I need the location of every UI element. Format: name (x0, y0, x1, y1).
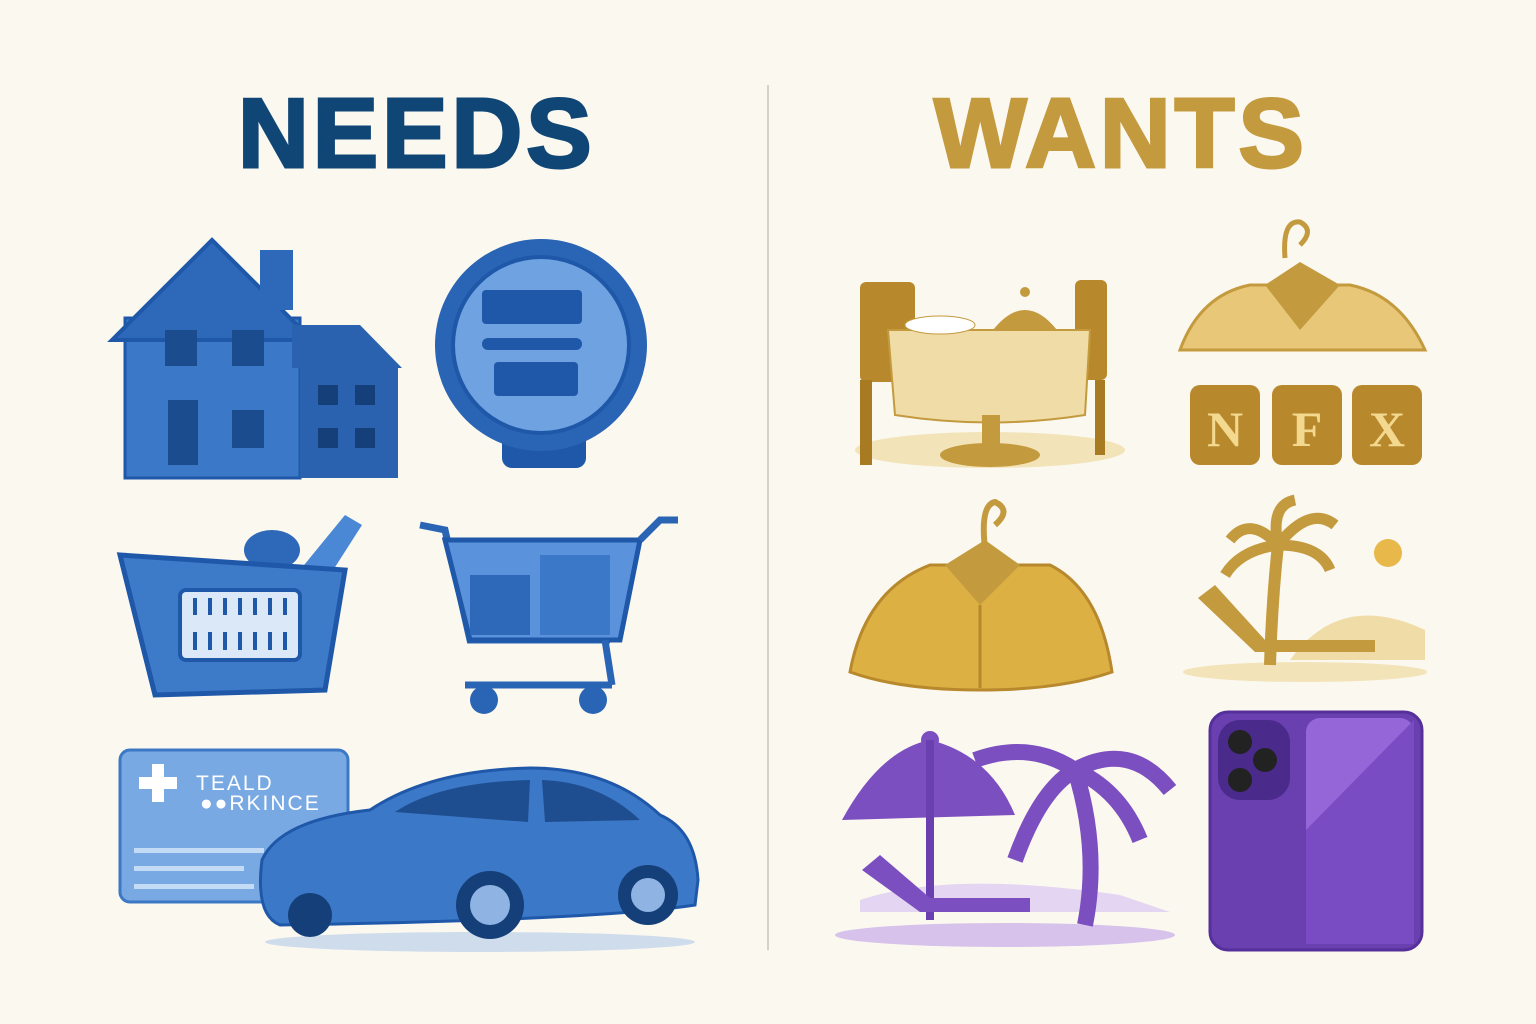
icon: shopping cart (420, 520, 678, 714)
title: wants: WANTS (934, 78, 1308, 188)
icon: smartphone (1210, 712, 1422, 950)
title: needs: NEEDS (238, 78, 596, 188)
icon: restaurant dining (855, 280, 1125, 468)
icon: NFX streaming tiles: X (1369, 401, 1405, 457)
icon: insurance card: ●●RKINCE (200, 792, 321, 815)
icon: shirt on hanger (850, 502, 1112, 690)
icon: NFX streaming tiles (1190, 385, 1422, 465)
icon: car (260, 768, 698, 952)
icon: house (112, 240, 402, 478)
icon: utility meter (435, 239, 647, 468)
icon: beach lounger with palm (1183, 500, 1427, 682)
icon: beach umbrella (835, 731, 1175, 947)
icon: shirt on hanger (small) (1180, 222, 1425, 350)
icon: insurance card: TEALD (196, 772, 274, 795)
icon: insurance card (120, 750, 348, 902)
icon: NFX streaming tiles: F (1292, 401, 1322, 457)
icon: NFX streaming tiles: N (1207, 401, 1243, 457)
icon: grocery basket (120, 515, 362, 695)
